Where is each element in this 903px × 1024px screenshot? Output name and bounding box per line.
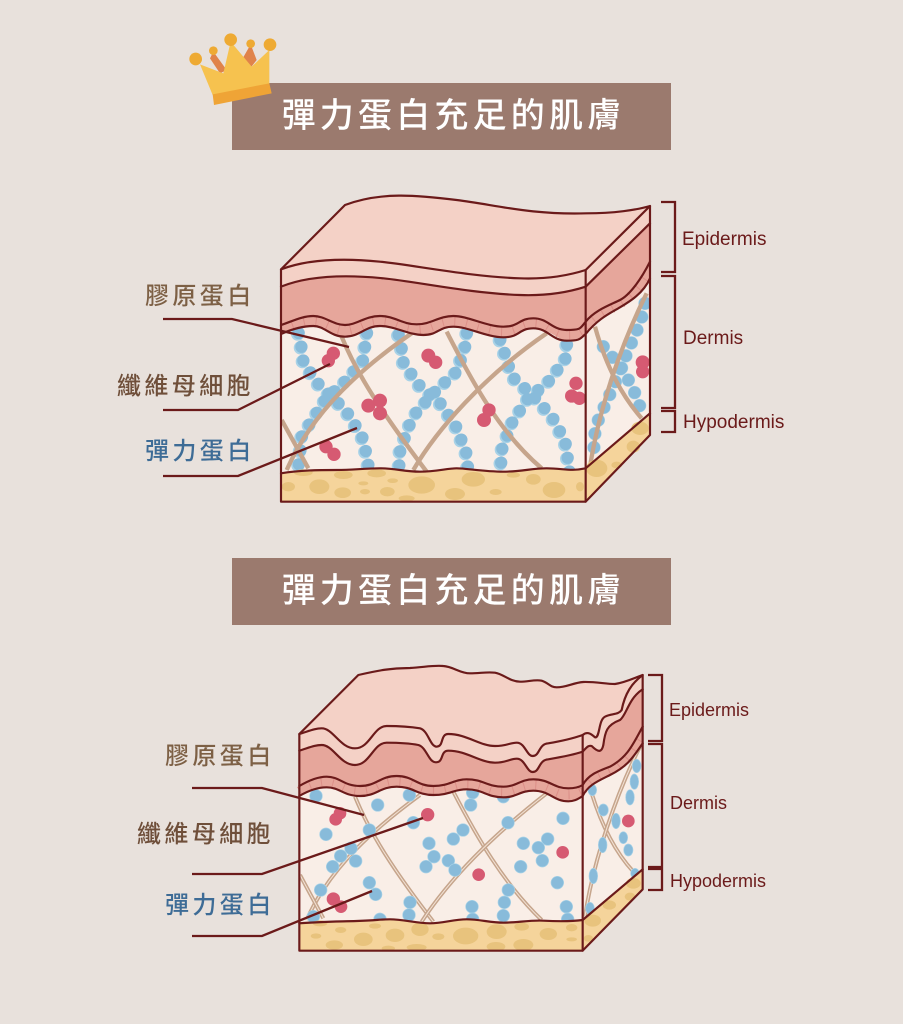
label: Epidermis: Epidermis	[669, 700, 749, 720]
collagen fibres	[300, 792, 547, 922]
dermis upper layer	[299, 689, 643, 801]
collagen fibres, side face	[590, 293, 647, 467]
heading: lower banner	[232, 558, 671, 625]
label: collagen: 膠原蛋白	[145, 283, 255, 310]
leader lines: top diagram	[163, 318, 358, 478]
label: Epidermis: Epidermis	[682, 229, 766, 250]
diagram: aged skin cross-section	[297, 664, 644, 952]
fibroblast cells	[327, 807, 635, 913]
elastin chains, side face	[593, 303, 645, 460]
leader lines: lower diagram	[192, 786, 424, 938]
label: Hypodermis: Hypodermis	[683, 412, 784, 433]
dermis background	[281, 206, 650, 502]
heading: top banner	[232, 83, 671, 150]
hypodermis fat layer	[299, 869, 643, 951]
elastin bead chains	[298, 333, 570, 477]
label: Hypodermis: Hypodermis	[670, 871, 766, 891]
label: fibroblast: 纖維母細胞	[137, 821, 274, 848]
label: Dermis: Dermis	[670, 793, 727, 813]
heading: top banner: 彈力蛋白充足的肌膚	[282, 97, 625, 135]
brackets: lower diagram layers	[648, 674, 664, 892]
diagram: healthy skin cross-section	[280, 194, 652, 503]
brackets: top diagram layers	[661, 200, 676, 434]
epidermis outer layer	[281, 196, 650, 295]
label: fibroblast: 纖維母細胞	[117, 373, 254, 400]
label: elastin: 彈力蛋白	[145, 438, 255, 465]
heading: lower banner: 彈力蛋白充足的肌膚	[282, 572, 625, 610]
epidermis outer layer	[299, 666, 643, 772]
scattered elastin beads	[307, 759, 641, 926]
collagen fibres, side face	[585, 747, 640, 917]
label: collagen: 膠原蛋白	[165, 743, 275, 770]
hypodermis fat layer	[281, 413, 650, 502]
dermis upper layer	[281, 223, 650, 341]
collagen fibres	[282, 332, 547, 472]
label: elastin: 彈力蛋白	[165, 892, 275, 919]
outlines	[281, 196, 650, 502]
fibroblast cell clusters	[319, 347, 650, 461]
label: Dermis: Dermis	[683, 328, 743, 349]
icon: crown	[189, 33, 276, 105]
dermis background	[299, 675, 643, 951]
outlines	[299, 666, 643, 951]
